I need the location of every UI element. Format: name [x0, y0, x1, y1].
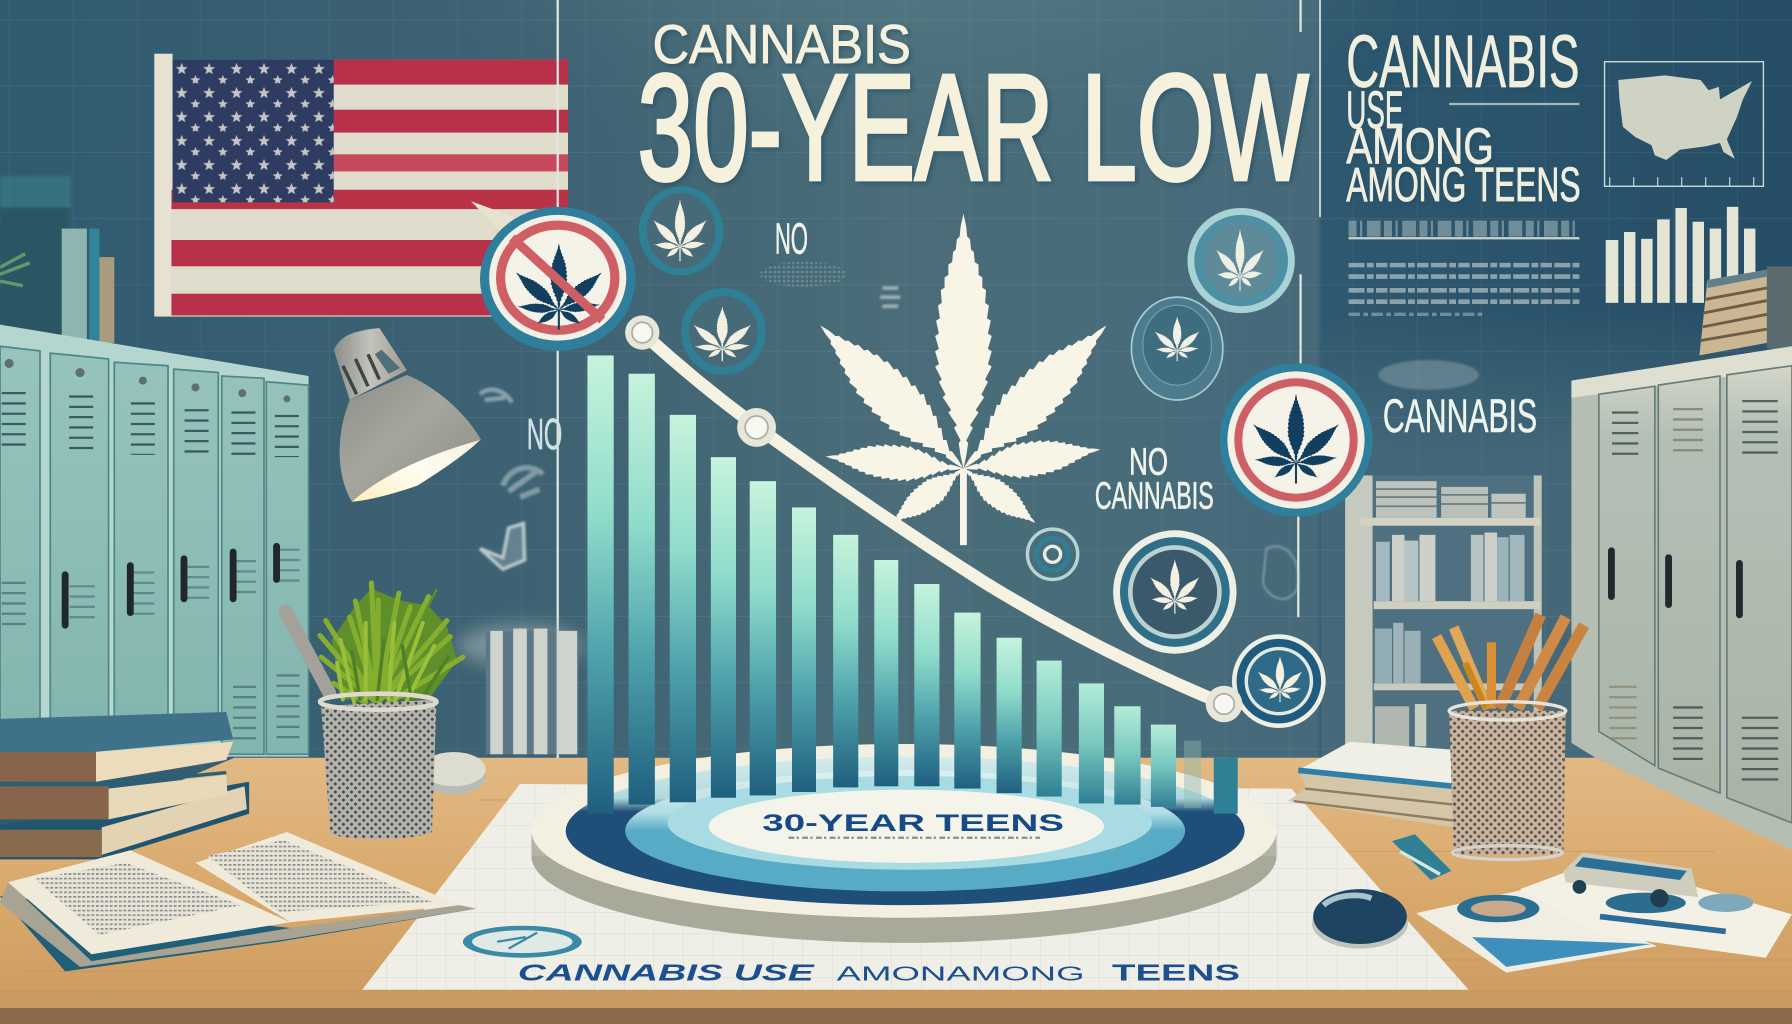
US map chart — [1605, 62, 1763, 186]
platform ring navy — [566, 757, 1245, 905]
paper caption: AMONAMONG — [837, 963, 1085, 986]
plant leaves — [320, 583, 463, 703]
trend node end — [1206, 686, 1242, 722]
side panel decorative lines and paragraph — [1349, 104, 1579, 314]
open book — [0, 832, 477, 971]
lamp neck — [334, 328, 407, 400]
pencil cup — [1437, 615, 1584, 859]
icon: ring badge large — [1113, 530, 1237, 654]
stack of notebooks right — [1288, 742, 1454, 827]
platform ring teal — [625, 770, 1185, 891]
paper caption — [518, 960, 1240, 986]
paper caption: TEENS — [1112, 960, 1240, 986]
trend node start — [625, 315, 659, 350]
icon: glass badge upper right — [1187, 208, 1295, 313]
platform center — [709, 790, 1104, 863]
platform label: 30-YEAR TEENS — [762, 810, 1064, 837]
computer mouse — [1312, 889, 1408, 949]
American flag — [154, 54, 568, 317]
bookshelf — [1345, 475, 1542, 750]
plant pot — [321, 699, 437, 839]
title line: cannabis: CANNABIS — [653, 13, 911, 75]
label: no cannabis: CANNABIS — [1095, 475, 1214, 517]
icon: ring badge lower — [1232, 634, 1326, 728]
clip object on desk — [1392, 834, 1451, 880]
cannabis label right: CANNABIS — [1383, 390, 1537, 442]
big cannabis leaf — [803, 214, 1124, 545]
no labels on wall — [527, 216, 1214, 517]
desk — [0, 758, 1792, 1024]
icon: leaf badge second — [681, 288, 766, 375]
stack of papers top right — [1699, 266, 1792, 355]
platform base — [531, 744, 1277, 943]
title line: 30-year low: 30-YEAR LOW — [638, 42, 1309, 211]
left bookshelf in background — [0, 176, 114, 343]
title: Cannabis 30-year low — [638, 13, 1309, 211]
no-label halftone scribble — [760, 262, 847, 287]
label: no cannabis: NO — [1129, 440, 1168, 482]
right lockers — [1571, 346, 1792, 851]
book top — [0, 712, 233, 782]
cup body — [1449, 711, 1566, 855]
small vehicle object — [1563, 853, 1698, 907]
lamp base — [422, 752, 486, 794]
left lockers — [0, 325, 309, 757]
mini bar chart — [1606, 207, 1755, 303]
paper under chart — [362, 784, 1469, 990]
platform ring light — [667, 776, 1152, 870]
trend node middle — [737, 408, 776, 447]
locker handles — [65, 546, 277, 625]
pencils — [1437, 615, 1584, 709]
wall doodles — [480, 288, 1479, 599]
radiator — [457, 625, 583, 754]
label: no top: NO — [775, 216, 808, 264]
icon: swirl badge — [1027, 529, 1078, 579]
icon: no cannabis sign right — [1219, 363, 1373, 517]
lamp light — [352, 440, 480, 502]
side panel heading: cannabis use among teens: AMONG — [1346, 116, 1494, 174]
potted plant — [320, 583, 463, 839]
icon: leaf badge top — [639, 186, 723, 275]
icon: no cannabis sign left — [471, 201, 635, 351]
icon: glass badge middle right — [1131, 297, 1223, 400]
desk lamp — [286, 328, 486, 794]
shelf books — [1375, 481, 1526, 746]
paper caption: CANNABIS USE — [518, 960, 815, 986]
lamp shade — [340, 375, 481, 502]
book middle — [0, 773, 227, 819]
papers on desk — [1416, 853, 1792, 973]
bar chart — [587, 355, 1238, 814]
icon: paper logo — [463, 926, 582, 958]
right panel divider lines — [558, 0, 1320, 789]
side panel heading: cannabis use among teens: AMONG TEENS — [1346, 159, 1581, 212]
label: no cannabis — [1095, 440, 1214, 517]
side panel heading: cannabis use among teens — [1346, 20, 1581, 212]
lamp arm — [286, 611, 329, 693]
side panel heading: cannabis use among teens: USE — [1346, 81, 1403, 140]
side panel heading: cannabis use among teens: CANNABIS — [1346, 20, 1579, 103]
trend line — [642, 333, 1224, 704]
stacked books — [0, 712, 249, 859]
book bottom — [0, 782, 249, 859]
locker vents — [14, 392, 288, 743]
label: no left: NO — [527, 411, 562, 459]
